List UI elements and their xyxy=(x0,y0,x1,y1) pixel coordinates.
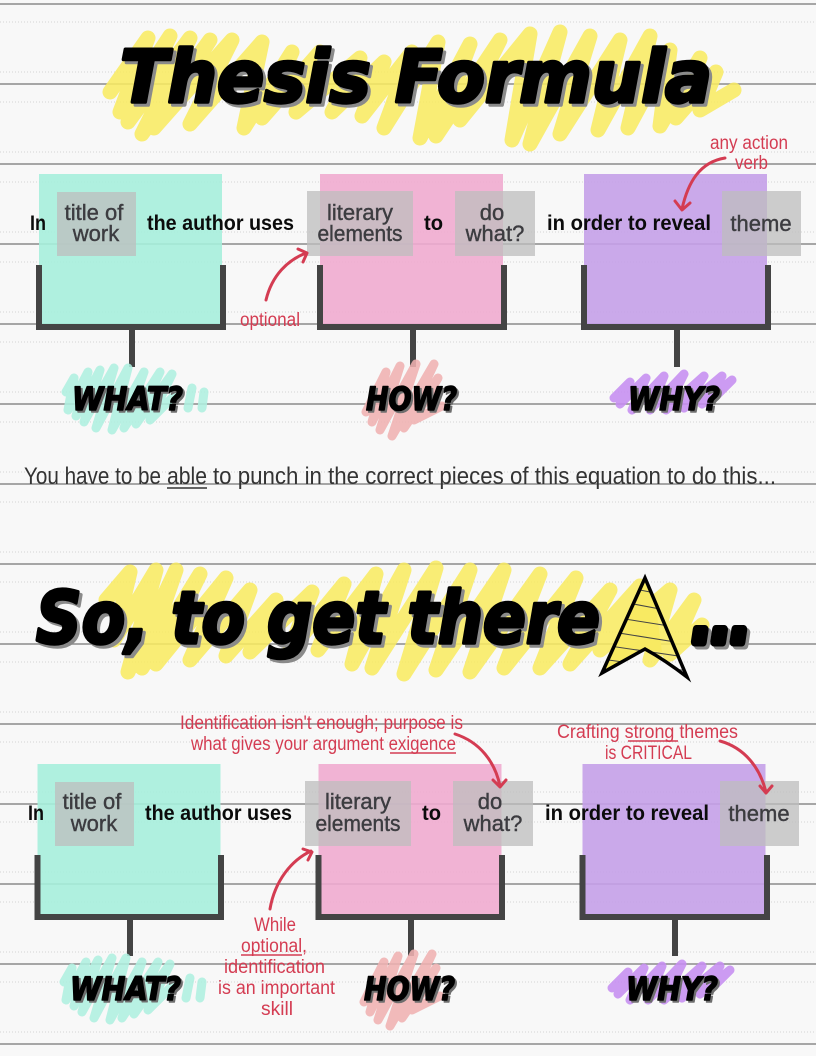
label: WHAT?: WHAT? xyxy=(70,970,181,1008)
grey placeholders xyxy=(57,191,801,256)
formula sentence: In xyxy=(28,802,44,825)
annotation: while optional: identification xyxy=(224,957,325,978)
formula sentence: to xyxy=(422,802,441,825)
coloured box: devices xyxy=(320,174,503,326)
label: HOW?: HOW? xyxy=(366,380,457,418)
annotation: any action verb: any action xyxy=(710,133,788,154)
label: WHAT?: WHAT? xyxy=(72,380,183,418)
formula sentence: work xyxy=(72,221,120,246)
text block: instruction: You have to be xyxy=(24,463,161,490)
bracket: how xyxy=(318,855,502,956)
annotation: themes: Crafting strong themes xyxy=(557,722,738,743)
formula sentence: to xyxy=(424,212,443,235)
text block: instruction: able xyxy=(167,463,207,490)
scribble: second title highlight xyxy=(106,568,702,674)
coloured box: devices xyxy=(318,764,502,916)
icon: sketched arrow xyxy=(594,578,696,677)
formula sentence xyxy=(30,200,792,246)
formula sentence: In xyxy=(30,212,46,235)
text block: instruction: to punch in the correct pieces of this equation to do this... xyxy=(213,463,776,490)
ellipsis: ... xyxy=(692,581,750,658)
label: WHY?: WHY? xyxy=(626,970,718,1008)
formula sentence: the author uses xyxy=(147,212,294,235)
title: So, to get there: So, to get there xyxy=(36,576,600,660)
annotation: themes xyxy=(557,722,772,793)
bracket: how xyxy=(320,265,504,367)
bracket: why xyxy=(584,265,768,367)
annotation: while optional xyxy=(218,849,336,1020)
formula sentence: in order to reveal xyxy=(545,802,709,825)
bracket: what xyxy=(39,265,223,367)
label: HOW?: HOW? xyxy=(364,970,455,1008)
coloured box: theme xyxy=(584,174,767,326)
formula sentence: what? xyxy=(465,221,524,246)
annotation: while optional: While xyxy=(254,915,296,936)
formula sentence: what? xyxy=(463,811,522,836)
annotation: any action verb: verb xyxy=(735,153,768,174)
coloured box: title xyxy=(39,174,222,326)
annotation: while optional: optional, xyxy=(241,936,307,957)
formula sentence: title of xyxy=(65,200,124,225)
annotation: any action verb xyxy=(675,133,788,210)
formula sentence xyxy=(28,789,790,836)
annotation: identification xyxy=(180,713,506,787)
annotation: optional xyxy=(240,249,307,331)
formula sentence: do xyxy=(478,789,502,814)
annotation: while optional: is an important xyxy=(218,978,336,999)
panel: first formula xyxy=(30,133,801,436)
formula sentence: work xyxy=(70,811,118,836)
formula sentence: title of xyxy=(63,789,122,814)
formula sentence: in order to reveal xyxy=(547,212,711,235)
formula sentence: the author uses xyxy=(145,802,292,825)
formula sentence: do xyxy=(480,200,504,225)
scribble: title highlight xyxy=(110,32,734,144)
scribble: why xyxy=(612,964,730,1000)
bracket: why xyxy=(582,855,767,956)
annotation: identification: what gives your argument exigence xyxy=(190,734,456,755)
formula sentence: theme xyxy=(730,211,792,236)
coloured box: title xyxy=(38,764,220,916)
panel: second formula xyxy=(28,713,799,1026)
scribble: why xyxy=(614,374,732,410)
formula sentence: literary xyxy=(325,789,391,814)
formula sentence: elements xyxy=(318,221,402,246)
annotation: identification: Identification isn't enough; purpose is xyxy=(180,713,463,734)
annotation: themes: is CRITICAL xyxy=(605,743,692,764)
scribble: how xyxy=(364,954,440,1026)
formula sentence: elements xyxy=(316,811,400,836)
annotation: optional: optional xyxy=(240,310,300,331)
scribble: what xyxy=(64,958,202,1020)
grey placeholders xyxy=(55,781,799,846)
label: WHY?: WHY? xyxy=(628,380,720,418)
annotation: while optional: skill xyxy=(261,999,293,1020)
coloured box: theme xyxy=(582,764,766,916)
title: Thesis Formula: Thesis Formula xyxy=(120,35,712,119)
scribble: how xyxy=(366,364,442,436)
formula sentence: literary xyxy=(327,200,393,225)
formula sentence: theme xyxy=(728,801,790,826)
bracket: what xyxy=(38,855,221,956)
scribble: what xyxy=(66,368,204,430)
